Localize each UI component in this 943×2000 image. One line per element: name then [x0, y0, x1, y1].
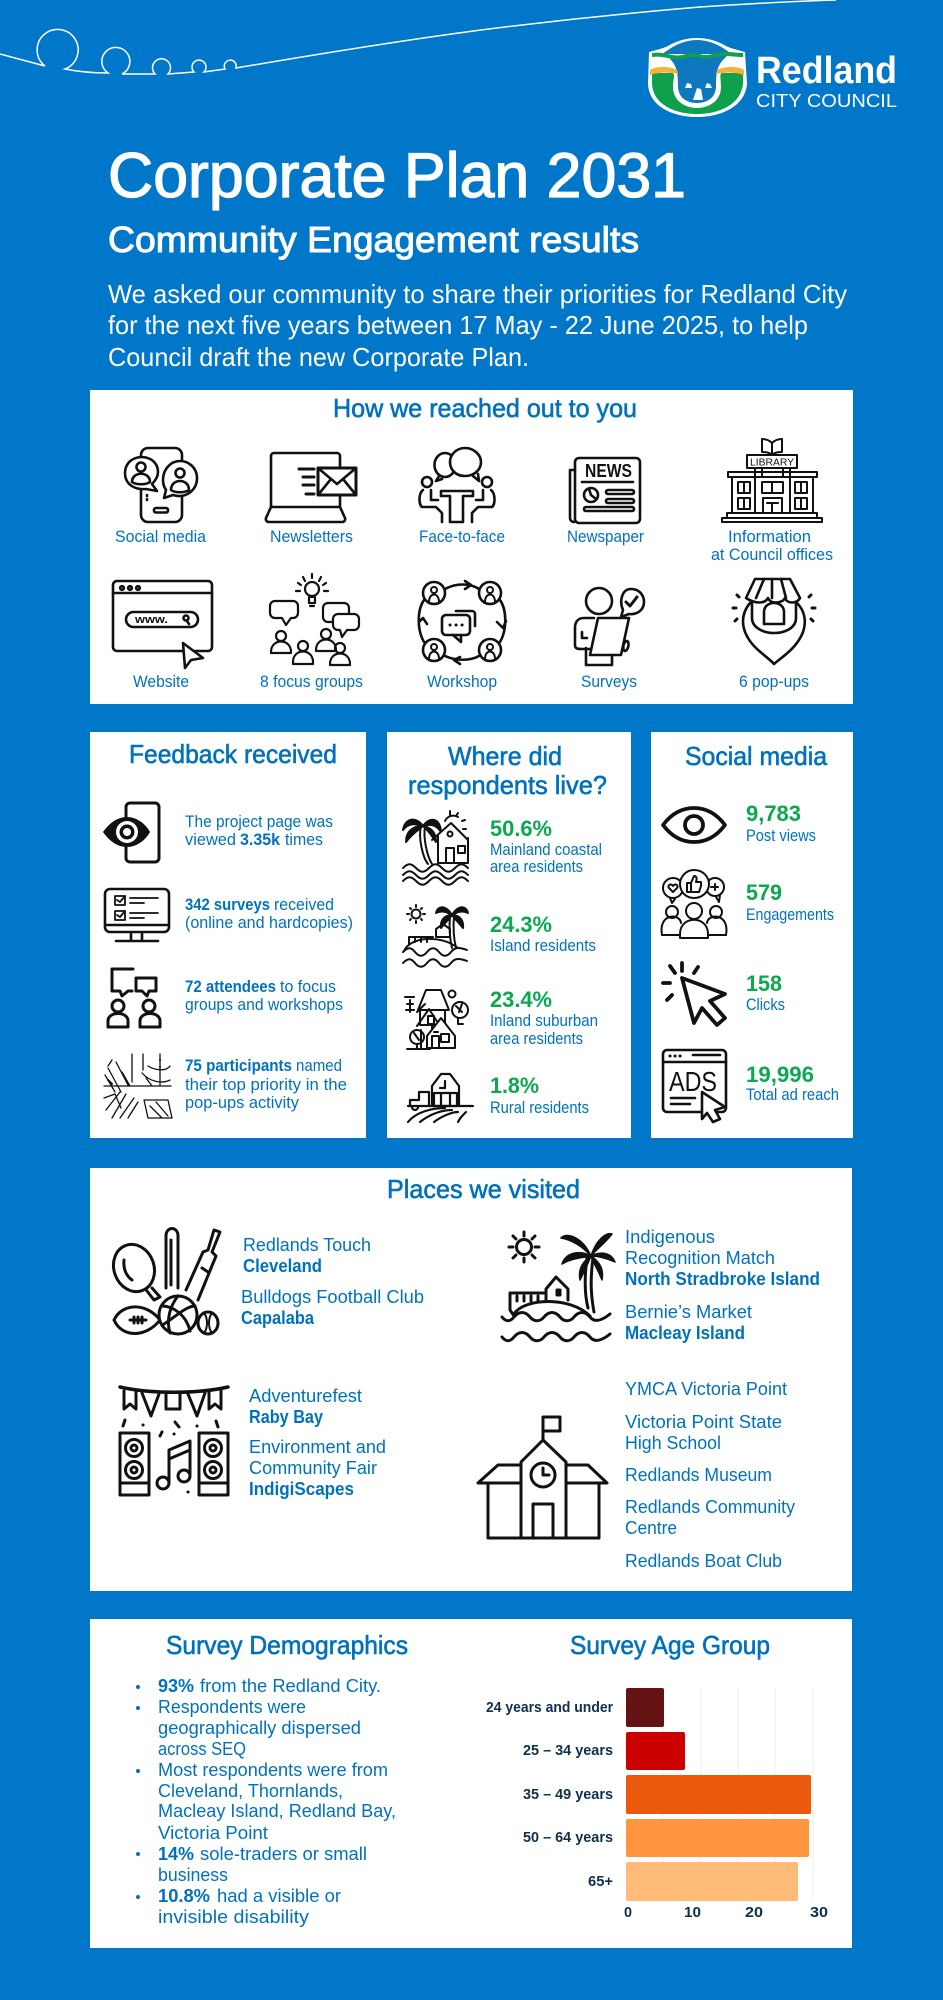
heading: survey demographics: Survey Demographics — [166, 1630, 408, 1660]
panel: feedback received — [90, 732, 366, 1138]
text: ad reach — [746, 1062, 839, 1104]
panel: where did respondents live — [387, 732, 631, 1138]
label: Newsletters — [270, 527, 353, 546]
text: festival places: Community Fair — [249, 1457, 377, 1478]
text: participants: 75 participants — [185, 1057, 292, 1075]
text: surveys received — [185, 896, 353, 932]
icon: newspaper — [570, 458, 640, 523]
text: inland stat: area residents — [490, 1030, 583, 1048]
text: sports places: Capalaba — [241, 1307, 315, 1328]
icon: surveys — [575, 588, 644, 665]
text: island stat: Island residents — [490, 937, 596, 955]
text: attendees — [185, 978, 343, 1014]
text: sports places: Cleveland — [243, 1255, 322, 1276]
text: island places: Recognition Match — [625, 1247, 775, 1268]
bullet list: had a visible or — [217, 1885, 341, 1906]
bullet list: geographically dispersed — [158, 1717, 361, 1738]
icon: newspaper: NEWS — [585, 461, 632, 481]
text: sports places — [241, 1234, 424, 1328]
icon: suburban houses — [405, 990, 468, 1049]
text: festival places: Environment and — [249, 1436, 386, 1457]
intro paragraph: We asked our community to share their priorities for Redland City — [108, 279, 847, 309]
text: attendees: groups and workshops — [185, 996, 343, 1014]
subtitle: Community Engagement results — [108, 219, 639, 260]
panel: social media — [651, 732, 853, 1138]
logo wordmark: Redland — [756, 50, 897, 92]
category labels: 35 – 49 years — [523, 1786, 613, 1803]
text: project page views — [185, 813, 333, 849]
label: Social media — [115, 527, 207, 546]
label: Newspaper — [567, 527, 644, 546]
text: project page views: viewed — [185, 831, 236, 849]
panel: survey — [90, 1619, 852, 1948]
bullet list: 10.8% — [158, 1885, 210, 1906]
text: island places: Indigenous — [625, 1226, 715, 1247]
heading: Social media — [685, 741, 828, 771]
icon: eye on phone — [103, 803, 159, 862]
intro paragraph — [108, 279, 847, 372]
text: ad reach: 19,996 — [746, 1062, 814, 1087]
logo: Redland City Council — [648, 38, 897, 117]
logo: Redland City Council: CITY COUNCIL — [756, 91, 897, 111]
text: clicks: Clicks — [746, 996, 785, 1014]
text: participants — [185, 1057, 347, 1112]
panel: how we reached out to you — [90, 390, 853, 704]
label: 8 focus groups — [260, 672, 363, 691]
text: surveys received: 342 surveys — [185, 896, 270, 914]
heading: Places we visited — [387, 1174, 580, 1204]
text: project page views: The project page was — [185, 813, 333, 831]
bullet list: Cleveland, Thornlands, — [158, 1780, 343, 1801]
text: participants: pop-ups activity — [185, 1094, 300, 1112]
icon: sports — [107, 1228, 220, 1334]
category labels — [486, 1699, 613, 1890]
bar: 50-64 years — [626, 1819, 809, 1857]
icon: click cursor — [663, 963, 725, 1025]
text: project page views: 3.35k — [240, 831, 281, 849]
text: participants: named — [296, 1057, 342, 1075]
icon: island — [403, 905, 468, 967]
text: project page views: times — [285, 831, 323, 849]
heading: survey age group: Survey Age Group — [570, 1630, 770, 1660]
axis ticks: 20 — [745, 1904, 763, 1921]
text: engagements: Engagements — [746, 906, 834, 924]
text: attendees: to focus — [280, 978, 336, 996]
heading: respondents live? — [408, 770, 607, 800]
intro paragraph: for the next five years between 17 May - 22 June 2025, to help — [108, 310, 808, 340]
bullet list: from the Redland City. — [200, 1675, 381, 1696]
heading: How we reached out to you — [333, 393, 637, 423]
text: festival places: IndigiScapes — [249, 1478, 354, 1499]
bullet list: 93% — [158, 1675, 194, 1696]
text: coastal stat: 50.6% — [490, 816, 552, 841]
text: island stat — [490, 912, 596, 955]
bar: 25-34 years — [626, 1732, 685, 1770]
label: Website — [133, 672, 189, 691]
text: island places — [625, 1226, 820, 1343]
text: inland stat: 23.4% — [490, 987, 552, 1012]
text: engagements — [746, 880, 834, 924]
text: engagements: 579 — [746, 880, 782, 905]
text: coastal stat — [490, 816, 602, 876]
text: school places: High School — [625, 1432, 721, 1453]
text: school places: Centre — [625, 1517, 677, 1538]
text: attendees: 72 attendees — [185, 978, 276, 996]
icon: monitor survey — [105, 889, 169, 941]
text: island stat: 24.3% — [490, 912, 552, 937]
text: rural stat — [490, 1073, 589, 1117]
icon: island — [502, 1232, 615, 1341]
bullet list: business — [158, 1864, 228, 1885]
text: rural stat: 1.8% — [490, 1073, 539, 1098]
axis ticks: 30 — [810, 1904, 828, 1921]
icon: engagements — [662, 870, 726, 938]
text: ad reach: Total ad reach — [746, 1086, 839, 1104]
label: Information — [728, 527, 811, 546]
label: Surveys — [581, 672, 637, 691]
text: coastal stat: area residents — [490, 858, 583, 876]
text: school places: Redlands Community — [625, 1496, 796, 1517]
bullet list: Victoria Point — [158, 1822, 268, 1843]
label: 6 pop-ups — [739, 672, 809, 691]
text: post views: Post views — [746, 827, 816, 845]
label: Face-to-face — [419, 527, 505, 546]
category labels: 65+ — [588, 1873, 613, 1890]
bullet list: invisible disability — [158, 1906, 310, 1927]
decorative coastline line — [0, 0, 836, 74]
text: clicks: 158 — [746, 971, 782, 996]
text: post views: 9,783 — [746, 801, 801, 826]
text: island places: Macleay Island — [625, 1322, 745, 1343]
icon: barn — [408, 1074, 473, 1122]
icon: eye — [663, 808, 725, 842]
category labels: 50 – 64 years — [523, 1829, 613, 1846]
icon: ads — [663, 1050, 726, 1122]
icon: face-to-face — [420, 448, 494, 522]
bullet list: sole-traders or small — [200, 1843, 367, 1864]
text: surveys received: (online and hardcopies) — [185, 914, 353, 932]
text: school places: Redlands Museum — [625, 1464, 772, 1485]
text: inland stat: Inland suburban — [490, 1012, 598, 1030]
text: post views — [746, 801, 816, 845]
icon: pop-ups — [733, 579, 815, 664]
category labels: 25 – 34 years — [523, 1742, 613, 1759]
text: school places: Redlands Boat Club — [625, 1550, 782, 1571]
heading — [408, 741, 607, 800]
icon: social media — [125, 448, 197, 522]
bar: 24 years and under — [626, 1688, 664, 1727]
text: school places: Victoria Point State — [625, 1411, 782, 1432]
text: island places: North Stradbroke Island — [625, 1268, 820, 1289]
label: Workshop — [427, 672, 497, 691]
text: school places: YMCA Victoria Point — [625, 1378, 787, 1399]
text: inland stat — [490, 987, 598, 1048]
heading: Feedback received — [129, 739, 337, 769]
icon: website — [113, 581, 212, 668]
text: clicks — [746, 971, 785, 1014]
icon: library: LIBRARY — [750, 458, 794, 468]
bullet list — [136, 1675, 396, 1927]
title: Corporate Plan 2031 — [108, 141, 686, 211]
icon: focus groups — [270, 574, 359, 665]
icon: ads: ADS — [669, 1066, 717, 1097]
bar chart: age group — [486, 1688, 828, 1921]
icon: library — [722, 439, 822, 522]
icon: festival — [120, 1387, 228, 1495]
axis ticks: 0 — [624, 1904, 632, 1921]
text: festival places — [249, 1385, 386, 1499]
text: festival places: Adventurefest — [249, 1385, 362, 1406]
text: festival places: Raby Bay — [249, 1406, 324, 1427]
bar: 65+ — [626, 1862, 798, 1901]
text: school places — [625, 1378, 796, 1571]
bullet list: Most respondents were from — [158, 1759, 388, 1780]
panel: places we visited — [90, 1168, 852, 1591]
text: sports places: Bulldogs Football Club — [241, 1286, 424, 1307]
text: island places: Bernie’s Market — [625, 1301, 752, 1322]
text: surveys received: received — [274, 896, 334, 914]
icon: coastal house — [403, 811, 468, 885]
text: coastal stat: Mainland coastal — [490, 841, 602, 859]
bullet list: 14% — [158, 1843, 194, 1864]
heading: Where did — [448, 741, 562, 771]
icon: newsletters — [266, 453, 356, 522]
icon: workshop — [419, 581, 506, 664]
icon: website: www. — [134, 614, 168, 626]
icon: school — [478, 1417, 607, 1538]
text: rural stat: Rural residents — [490, 1099, 589, 1117]
label: at Council offices — [711, 545, 833, 564]
axis ticks — [624, 1904, 828, 1921]
icon: chat people — [108, 969, 160, 1027]
bullet list: Respondents were — [158, 1696, 306, 1717]
bar: 35-49 years — [626, 1775, 811, 1814]
icon: hands on table — [104, 1054, 172, 1118]
axis ticks: 10 — [684, 1904, 701, 1921]
bullet list: Macleay Island, Redland Bay, — [158, 1800, 396, 1821]
bullet list: across SEQ — [158, 1738, 246, 1759]
logo emblem — [648, 38, 747, 117]
label — [711, 527, 833, 564]
category labels: 24 years and under — [486, 1699, 613, 1716]
text: sports places: Redlands Touch — [243, 1234, 371, 1255]
intro paragraph: Council draft the new Corporate Plan. — [108, 342, 529, 372]
text: participants: their top priority in the — [185, 1076, 347, 1094]
